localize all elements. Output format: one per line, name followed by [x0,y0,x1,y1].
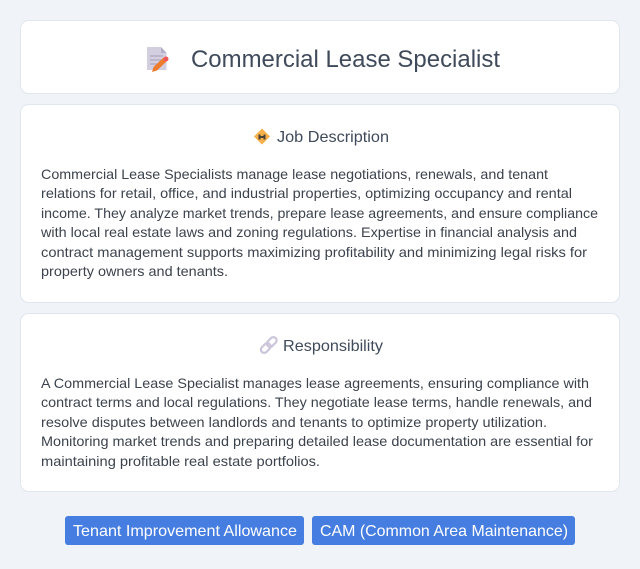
panel: responsibility [20,314,620,492]
panel: job description [20,104,620,302]
icon: chain link [260,336,278,354]
job description text: property owners and tenants. [41,263,228,279]
title text: Commercial Lease Specialist [191,46,500,73]
responsibility text: Monitoring market trends and preparing detailed lease documentation are essential for [41,433,593,449]
job description text: contract management supports maximizing profitability and minimizing legal risks for [41,244,587,260]
responsibility text: maintaining profitable real estate portfolios. [41,453,320,469]
tag: tenant improvement allowance [65,516,304,545]
responsibility text: contract terms and local regulations. They negotiate lease terms, handle renewals, and [41,394,592,410]
job description text: relations for retail, office, and industrial properties, optimizing occupancy and rental [41,185,572,201]
job description text [40,166,598,279]
job description text: income. They analyze market trends, prepare lease agreements, and ensure compliance [41,205,598,221]
tag: CAM [312,516,575,545]
heading: job description: Job Description [277,129,389,146]
heading: responsibility: Responsibility [283,338,383,355]
icon: construction diamond [254,128,270,144]
job description text: Commercial Lease Specialists manage lease negotiations, renewals, and tenant [41,166,548,182]
job description text: with local real estate laws and zoning regulations. Expertise in financial analysis and [40,224,577,240]
responsibility text: A Commercial Lease Specialist manages lease agreements, ensuring compliance with [41,375,589,391]
tag: CAM: CAM (Common Area Maintenance) [320,523,568,540]
icon: document with pencil [147,47,168,72]
responsibility text [41,375,593,469]
tag: tenant improvement allowance: Tenant Improvement Allowance [73,523,297,540]
panel: title [20,20,620,94]
responsibility text: resolve disputes between landlords and tenants to optimize property utilization. [41,414,547,430]
